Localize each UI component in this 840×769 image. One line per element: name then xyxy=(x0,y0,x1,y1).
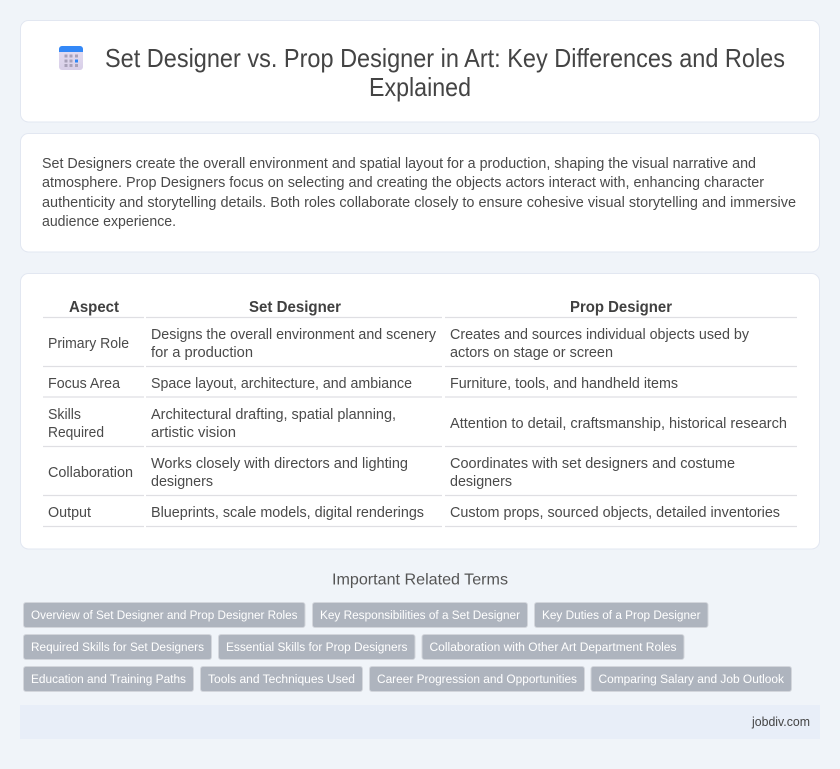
row: primary role: Creates and sources individual objects used by xyxy=(450,327,750,343)
row: focus area: Space layout, architecture, and ambiance xyxy=(151,376,412,392)
table header: Aspect xyxy=(69,299,120,316)
row: skills required xyxy=(48,407,787,441)
table header xyxy=(69,299,672,316)
row: primary role xyxy=(48,327,750,361)
panel: introduction xyxy=(20,134,820,252)
row: output: Custom props, sourced objects, detailed inventories xyxy=(450,505,780,521)
row: primary role: Primary Role xyxy=(48,336,129,352)
title xyxy=(105,45,785,102)
intro text xyxy=(42,156,796,230)
related term tags: Essential Skills for Prop Designers xyxy=(226,640,408,654)
row: primary role: for a production xyxy=(151,345,253,361)
intro text: Set Designers create the overall environment and spatial layout for a production, shaping the visual narrative and xyxy=(42,156,756,172)
header panel xyxy=(20,20,820,122)
footer bar xyxy=(20,705,820,739)
row: primary role: actors on stage or screen xyxy=(450,345,613,361)
row: collaboration: designers xyxy=(151,474,213,490)
related term tags: Key Duties of a Prop Designer xyxy=(542,608,700,622)
related term tags: Required Skills for Set Designers xyxy=(31,640,204,654)
intro text: audience experience. xyxy=(42,214,176,230)
title: Set Designer vs. Prop Designer in Art: Key Differences and Roles xyxy=(105,45,785,73)
related term tags: Key Responsibilities of a Set Designer xyxy=(320,608,520,622)
row: focus area xyxy=(48,376,678,392)
related term tags: Comparing Salary and Job Outlook xyxy=(598,672,785,686)
row: primary role: Designs the overall environment and scenery xyxy=(151,327,437,343)
row: collaboration xyxy=(48,456,735,490)
row: focus area: Furniture, tools, and handheld items xyxy=(450,376,678,392)
row: skills required: Architectural drafting, spatial planning, xyxy=(151,407,396,423)
icon: calendar grid xyxy=(59,46,83,70)
row: skills required: Required xyxy=(48,425,104,441)
related term tags: Career Progression and Opportunities xyxy=(377,672,577,686)
related term tags: Education and Training Paths xyxy=(31,672,186,686)
related term tags: Tools and Techniques Used xyxy=(208,672,355,686)
heading: related terms: Important Related Terms xyxy=(332,572,508,588)
row: collaboration: Coordinates with set designers and costume xyxy=(450,456,735,472)
footer source: jobdiv.com xyxy=(751,715,810,729)
related term tags: Collaboration with Other Art Department Roles xyxy=(430,640,676,654)
row: output: Output xyxy=(48,505,91,521)
row: collaboration: designers xyxy=(450,474,512,490)
related term tags xyxy=(24,602,792,692)
row: collaboration: Collaboration xyxy=(48,465,133,481)
row: output xyxy=(48,505,780,521)
row: focus area: Focus Area xyxy=(48,376,120,392)
intro text: atmosphere. Prop Designers focus on selecting and creating the objects actors interact with, enhancing character xyxy=(42,175,764,191)
table header: Set Designer xyxy=(249,299,341,316)
table header: Prop Designer xyxy=(570,299,672,316)
row: skills required: Skills xyxy=(48,407,81,423)
title: Explained xyxy=(369,74,471,102)
row: collaboration: Works closely with directors and lighting xyxy=(151,456,408,472)
row: skills required: artistic vision xyxy=(151,425,236,441)
panel: comparison table xyxy=(20,274,820,549)
row: skills required: Attention to detail, craftsmanship, historical research xyxy=(450,416,787,432)
related term tags: Overview of Set Designer and Prop Designer Roles xyxy=(31,608,298,622)
intro text: authenticity and storytelling details. Both roles collaborate closely to ensure cohesive visual storytelling and immersive xyxy=(42,195,796,211)
row: output: Blueprints, scale models, digital renderings xyxy=(151,505,424,521)
